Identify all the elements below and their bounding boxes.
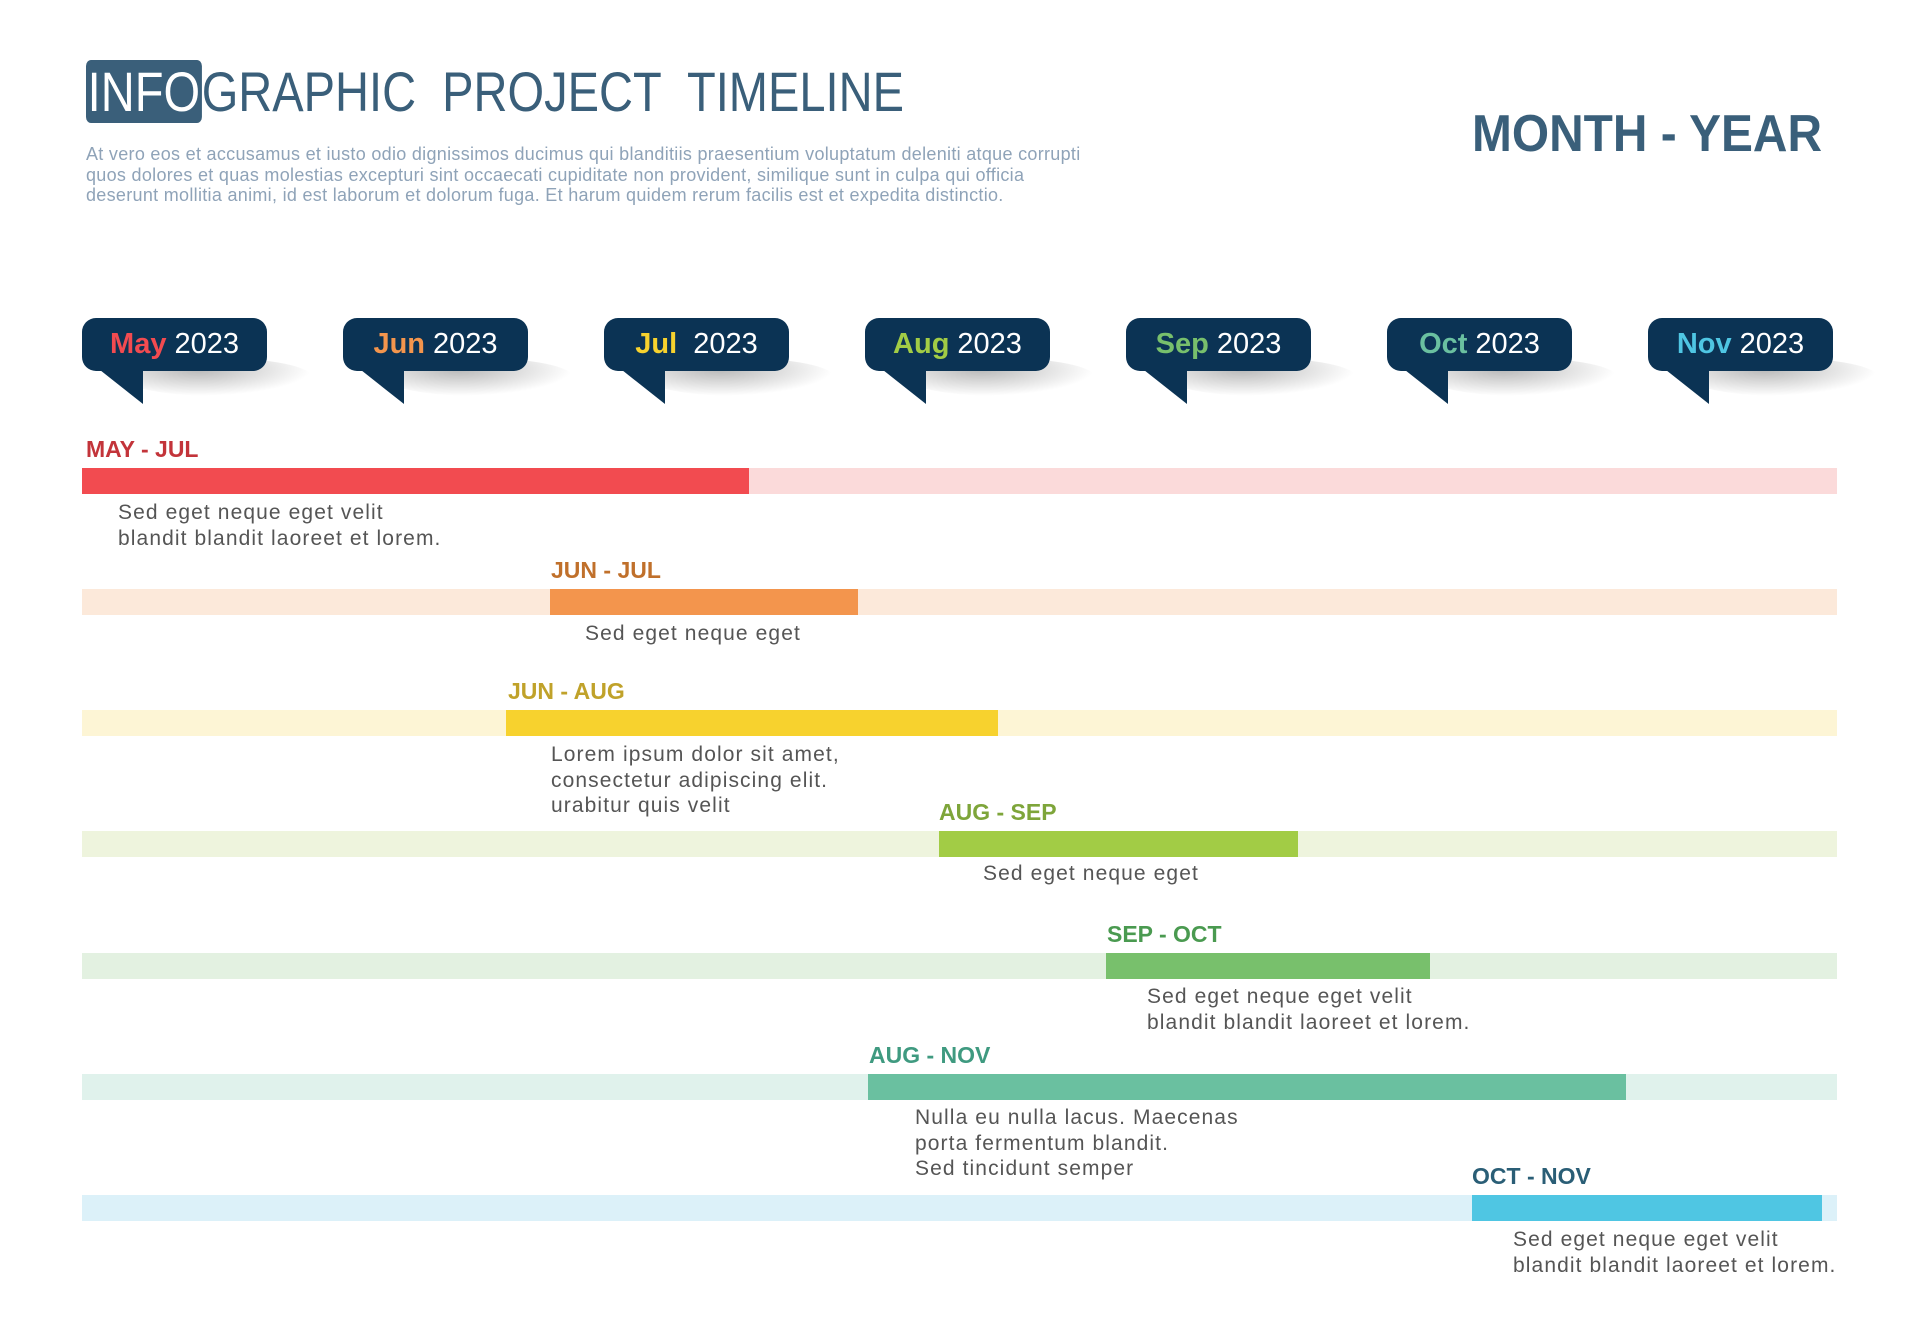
bar [82,468,1837,494]
month-year heading: MONTH - YEAR [1472,105,1822,163]
description: urabitur quis velit [551,794,731,817]
description [915,1106,1239,1180]
bar [82,1195,1837,1221]
row 4: Aug-Sep [82,799,1837,885]
description [118,501,441,550]
bubble: Sep: Sep 2023 [1156,328,1281,360]
bar [82,1074,1837,1100]
bar [82,831,1837,857]
bar [82,953,1837,979]
description [551,743,840,817]
bar [82,710,1837,736]
bubble: May: May 2023 [110,328,239,360]
row 1: May-Jul [82,436,1837,550]
bubble: May [82,318,298,404]
bubble: Nov: Nov 2023 [1677,328,1804,360]
bubble: Sep [1126,318,1342,404]
description [1513,1228,1836,1276]
description: Nulla eu nulla lacus. Maecenas [915,1106,1239,1129]
bubble: Jun [343,318,558,404]
description: Lorem ipsum dolor sit amet, [551,743,840,766]
label: OCT - NOV [1472,1163,1591,1189]
description: Sed tincidunt semper [915,1157,1134,1180]
label: AUG - NOV [869,1042,990,1068]
bubble: Nov [1648,318,1864,404]
subtitle text [86,144,1080,205]
subtitle text: At vero eos et accusamus et iusto odio dignissimos ducimus qui blanditiis praesentium voluptatum deleniti atque corrupti [86,144,1080,164]
description: blandit blandit laoreet et lorem. [1513,1254,1836,1276]
title: INFOGRAPHIC PROJECT TIMELINE [88,60,904,123]
row 5: Sep-Oct [82,921,1837,1034]
description: Sed eget neque eget velit [118,501,384,524]
description: porta fermentum blandit. [915,1132,1169,1154]
bubble: Oct [1387,318,1602,404]
description: Sed eget neque eget velit [1513,1228,1779,1251]
description: blandit blandit laoreet et lorem. [118,526,441,550]
bubble: Aug: Aug 2023 [893,328,1022,360]
row 3: Jun-Aug [82,678,1837,817]
bubble: Jul: Jul 2023 [635,328,758,360]
description [1147,985,1470,1034]
label: MAY - JUL [86,436,198,462]
label: AUG - SEP [939,799,1057,825]
label: JUN - JUL [551,557,661,583]
bar [82,589,1837,615]
row 7: Oct-Nov [82,1163,1837,1276]
label: SEP - OCT [1107,921,1222,947]
subtitle text: quos dolores et quas molestias excepturi sint occaecati cupiditate non provident, similique sunt in culpa qui officia [86,164,1024,184]
bubble: Aug [865,318,1080,404]
description: consectetur adipiscing elit. [551,768,828,792]
description: blandit blandit laoreet et lorem. [1147,1010,1470,1034]
subtitle text: deserunt mollitia animi, id est laborum et dolorum fuga. Et harum quidem rerum facilis est et expedita distinctio. [86,185,1004,205]
description: Sed eget neque eget [585,622,801,645]
description: Sed eget neque eget [983,862,1199,885]
bubble: Jul [604,318,820,404]
bubble: Oct: Oct 2023 [1419,328,1540,360]
label: JUN - AUG [508,678,625,704]
description: Sed eget neque eget velit [1147,985,1413,1008]
row 2: Jun-Jul [82,557,1837,645]
row 6: Aug-Nov [82,1042,1837,1180]
bubble: Jun: Jun 2023 [373,328,498,360]
